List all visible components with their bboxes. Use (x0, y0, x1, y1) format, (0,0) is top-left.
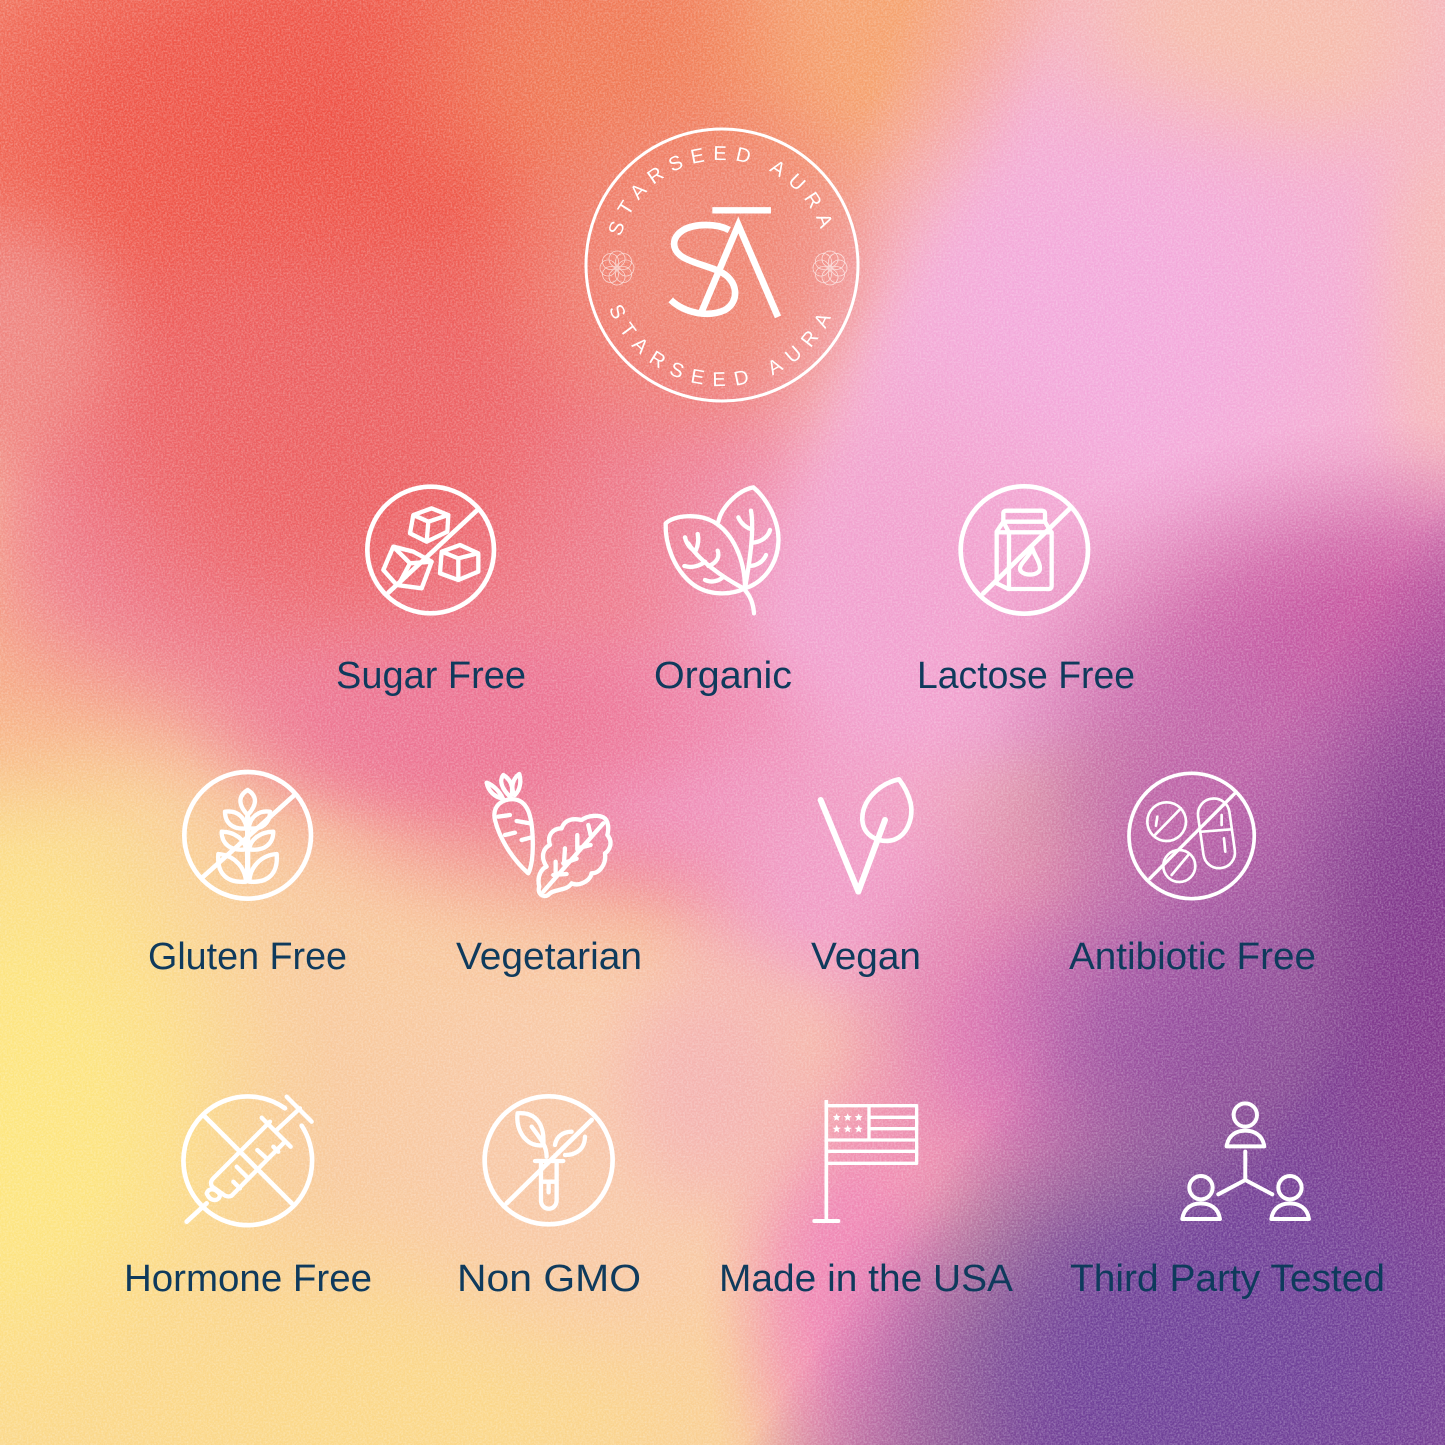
label: sugar free: Sugar Free (336, 655, 526, 697)
label: non gmo: Non GMO (457, 1258, 641, 1300)
label: antibiotic free: Antibiotic Free (1069, 936, 1316, 978)
lettuce leaf (539, 816, 611, 896)
icon: lactose free (961, 486, 1088, 614)
logo flower left (600, 251, 634, 285)
label: organic: Organic (654, 655, 792, 697)
carrot (487, 774, 533, 873)
icon: organic (666, 487, 778, 613)
icon: hormone free (183, 1096, 312, 1225)
logo flower right (813, 251, 847, 285)
logo badge (584, 128, 860, 402)
label: vegan: Vegan (811, 936, 921, 978)
label: vegetarian: Vegetarian (456, 936, 642, 978)
icon: non gmo (485, 1096, 613, 1224)
label: gluten free: Gluten Free (148, 936, 347, 978)
icon: sugar free (367, 487, 494, 613)
icon: antibiotic free (1129, 773, 1254, 899)
icon: third party tested (1182, 1103, 1309, 1219)
logo monogram SA (671, 210, 778, 317)
label: made in the usa: Made in the USA (719, 1258, 1014, 1300)
icon: vegan (821, 779, 911, 892)
logo text: bottom arc: STARSEED AURA (610, 305, 832, 386)
icon: usa flag (814, 1100, 917, 1221)
icon: gluten free (184, 772, 311, 899)
logo text: top arc: STARSEED AURA (609, 146, 832, 235)
label: third party tested: Third Party Tested (1070, 1258, 1385, 1300)
icon: vegetarian (487, 774, 611, 896)
label: lactose free: Lactose Free (917, 655, 1135, 697)
label: hormone free: Hormone Free (124, 1258, 372, 1300)
